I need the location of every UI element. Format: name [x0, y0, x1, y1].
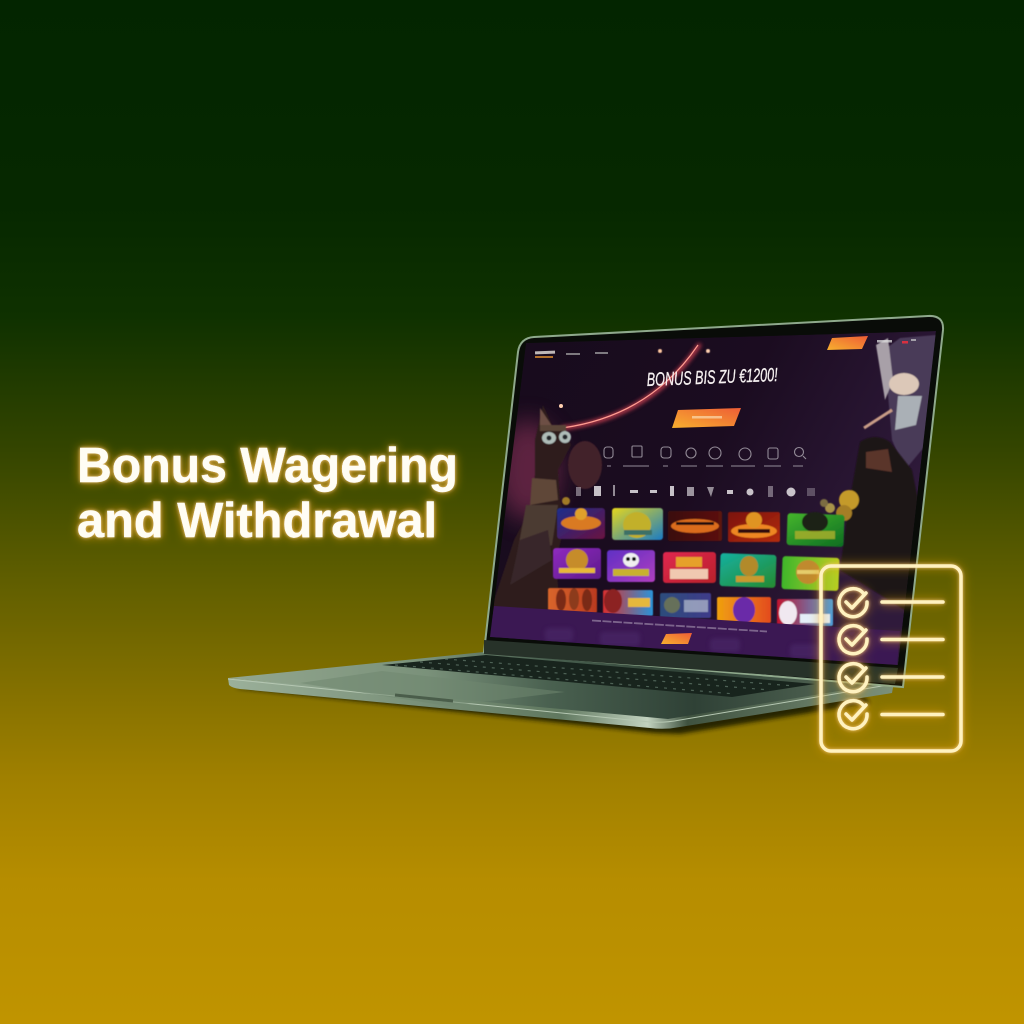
row one tiles — [557, 508, 845, 547]
checklist item four — [839, 701, 943, 729]
laptop lid — [484, 316, 943, 687]
category labels — [607, 465, 803, 467]
checklist item one — [839, 589, 943, 617]
game tile grid — [548, 508, 845, 626]
row two tiles — [553, 548, 840, 591]
title — [77, 439, 458, 548]
right warrior character — [562, 437, 918, 610]
front notch — [395, 695, 453, 701]
trackpad — [300, 671, 565, 706]
checklist frame — [821, 566, 961, 751]
laptop — [228, 316, 943, 734]
top navigation — [535, 336, 916, 358]
title: Bonus Wagering — [77, 439, 458, 493]
right angel character — [864, 335, 936, 470]
laptop base — [228, 652, 894, 729]
infographic canvas — [0, 294, 1024, 1024]
bonus button — [672, 408, 741, 428]
laptop ground shadow — [235, 680, 870, 734]
category icons — [604, 446, 806, 460]
left robot character — [490, 405, 602, 612]
keyboard — [382, 655, 815, 697]
screen — [489, 331, 936, 666]
title: and Withdrawal — [77, 494, 437, 548]
checklist icon — [821, 566, 961, 751]
pink arc and glow — [496, 344, 710, 520]
purple footer band — [489, 606, 900, 666]
bonus headline: BONUS BIS ZU €1200! — [646, 365, 779, 391]
checklist item three — [839, 664, 943, 692]
row three tiles — [548, 588, 833, 626]
provider icons — [576, 485, 815, 497]
checklist item two — [839, 626, 943, 654]
